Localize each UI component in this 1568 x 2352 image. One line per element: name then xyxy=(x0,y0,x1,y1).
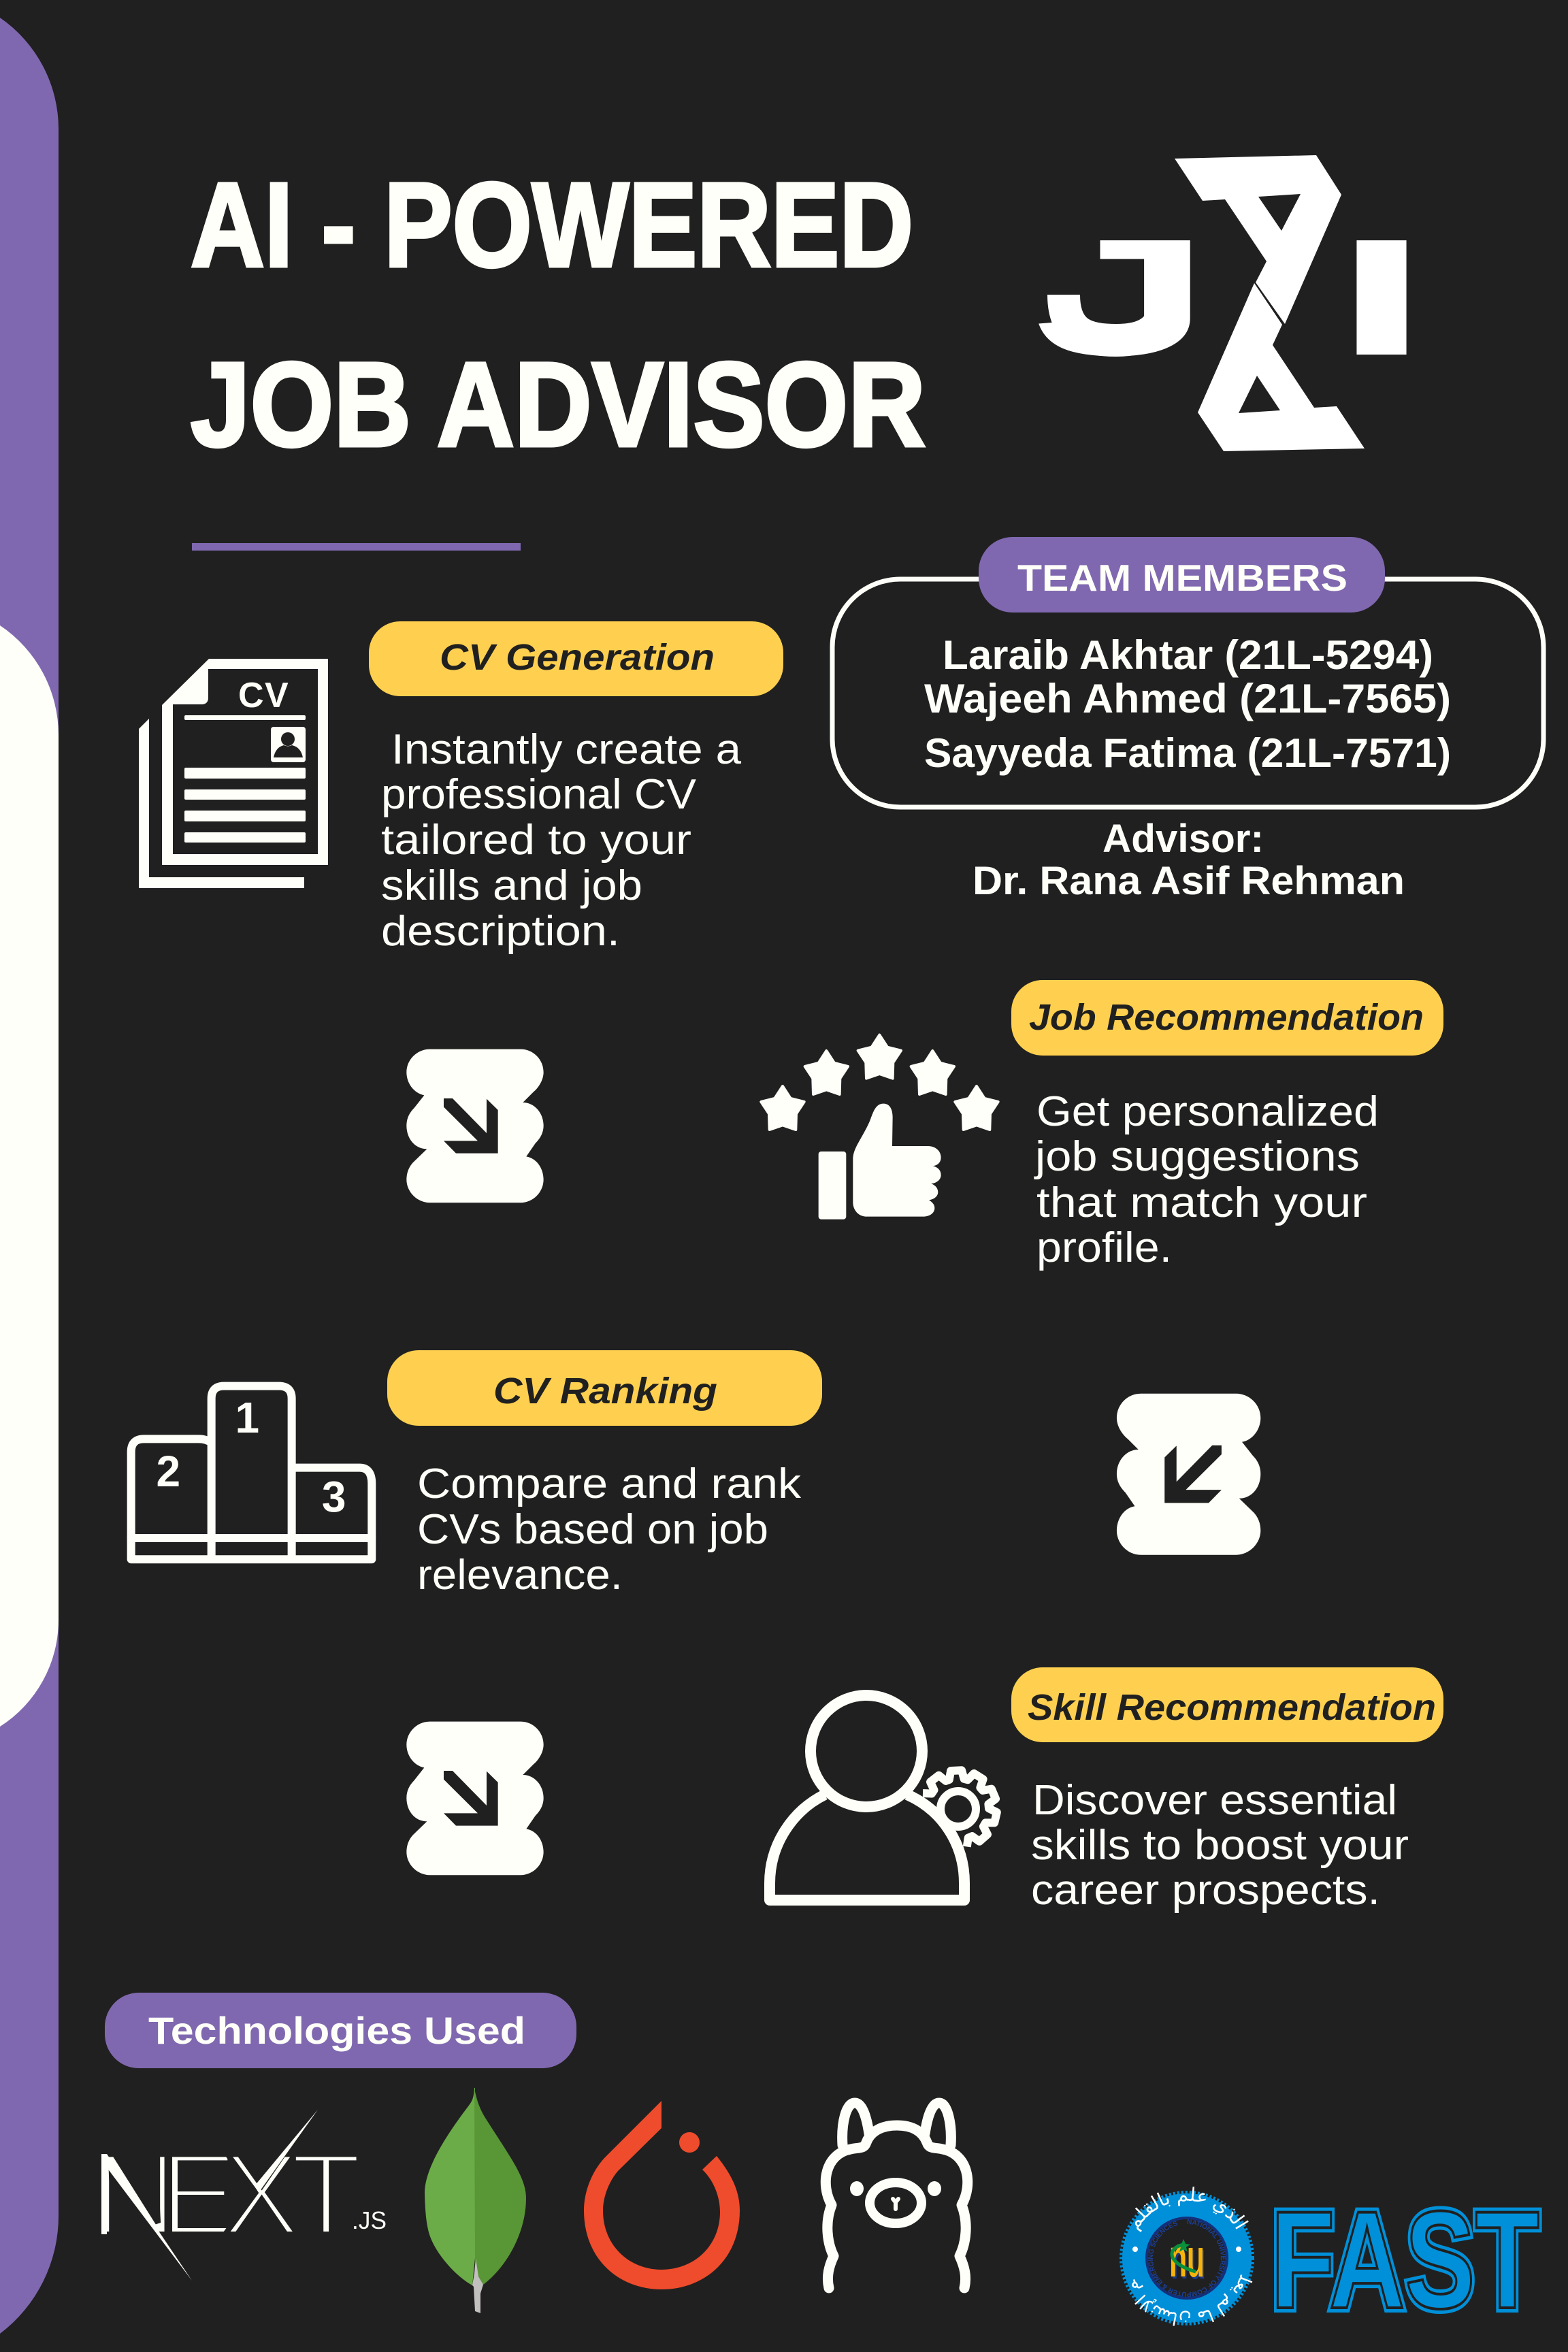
icon: CV document xyxy=(139,659,328,888)
left purple strip xyxy=(0,18,59,2334)
skill recommendation description: skills to boost your xyxy=(1031,1822,1409,1869)
logo: NU university seal: nu xyxy=(1169,2227,1205,2288)
logo: Ollama llama xyxy=(826,2103,968,2288)
job recommendation description: profile. xyxy=(1036,1224,1172,1271)
logo: NU university seal: الذي علم بالقلم xyxy=(1135,2187,1249,2232)
icon: podium: 3 xyxy=(322,1473,346,1522)
advisor: Advisor: xyxy=(1102,817,1264,861)
CV ranking description: relevance. xyxy=(417,1552,623,1599)
logo: NU university seal xyxy=(1120,2187,1254,2326)
CV generation pill xyxy=(369,621,783,696)
title: JOB ADVISOR xyxy=(191,338,926,472)
advisor xyxy=(973,817,1405,903)
logo: JAI mark: I xyxy=(1334,205,1430,390)
job recommendation description: job suggestions xyxy=(1034,1133,1360,1180)
title xyxy=(191,159,926,472)
icon: person with gear xyxy=(770,1695,997,1900)
logo: Next.js: .JS xyxy=(352,2206,387,2234)
panel: job recommendation xyxy=(761,980,1443,1271)
skill recommendation label: Skill Recommendation xyxy=(1028,1687,1436,1728)
title underline xyxy=(192,543,521,551)
logo: JAI mark: J xyxy=(1034,204,1212,390)
CV ranking description: CVs based on job xyxy=(417,1506,768,1553)
panel: team members xyxy=(832,537,1544,807)
CV generation description: skills and job xyxy=(381,862,642,909)
icon: podium xyxy=(131,1386,372,1559)
CV generation description xyxy=(381,726,742,955)
panel: CV ranking xyxy=(131,1350,822,1599)
team member names: Laraib Akhtar (21L-5294) xyxy=(943,632,1433,678)
team member names: Wajeeh Ahmed (21L-7565) xyxy=(924,676,1451,721)
skill recommendation description xyxy=(1031,1777,1409,1914)
CV ranking pill xyxy=(387,1350,822,1426)
CV ranking label: CV Ranking xyxy=(493,1371,717,1411)
logo: JAI mark xyxy=(1034,155,1430,451)
technologies heading: Technologies Used xyxy=(148,2009,525,2052)
icon: podium: 1 xyxy=(235,1393,259,1442)
logo: MongoDB leaf xyxy=(425,2088,526,2313)
logo: NU university seal: NATIONAL UNIVERSITY OF COMPUTER & EMERGING SCIENCES xyxy=(1148,2219,1226,2297)
job recommendation label: Job Recommendation xyxy=(1029,997,1424,1038)
panel: skill recommendation xyxy=(770,1667,1443,1914)
job recommendation pill xyxy=(1011,980,1443,1056)
logo: NU university seal: nu xyxy=(1171,2230,1206,2290)
job recommendation description xyxy=(1034,1088,1379,1271)
advisor: Dr. Rana Asif Rehman xyxy=(973,859,1405,903)
skill recommendation pill xyxy=(1011,1667,1443,1742)
icon: CV document: CV xyxy=(238,676,289,715)
CV generation description: professional CV xyxy=(381,771,697,818)
job recommendation description: that match your xyxy=(1036,1179,1367,1226)
CV generation description: description. xyxy=(381,908,620,955)
CV ranking description: Compare and rank xyxy=(417,1460,802,1507)
logo: PyTorch xyxy=(584,2101,740,2289)
title: AI - POWERED xyxy=(191,159,913,292)
arrow: to CV ranking xyxy=(1117,1394,1260,1555)
CV generation label: CV Generation xyxy=(440,637,715,678)
arrow: to skill recommendation xyxy=(406,1722,544,1875)
icon: stars and thumbs up xyxy=(761,1035,998,1220)
team members heading: TEAM MEMBERS xyxy=(1017,557,1348,599)
team member names: Sayyeda Fatima (21L-7571) xyxy=(924,730,1451,776)
skill recommendation description: career prospects. xyxy=(1031,1867,1380,1914)
CV generation description: Instantly create a xyxy=(391,726,742,773)
left white panel xyxy=(0,625,59,1727)
team members pill xyxy=(979,537,1385,612)
team member names xyxy=(924,632,1451,776)
logo: Next.js: NEXT xyxy=(93,2129,361,2259)
CV generation description: tailored to your xyxy=(381,817,691,864)
logo: Next.js xyxy=(93,2110,387,2281)
panel: CV generation xyxy=(139,621,783,955)
skill recommendation description: Discover essential xyxy=(1032,1777,1397,1824)
technologies pill xyxy=(105,1993,576,2068)
panel: technologies used xyxy=(93,1993,968,2313)
logo: NU university seal: علم الإنسان ما لم يعلم xyxy=(1132,2274,1252,2326)
CV ranking description xyxy=(417,1460,802,1599)
icon: podium: 2 xyxy=(157,1447,180,1496)
job recommendation description: Get personalized xyxy=(1036,1088,1379,1135)
arrow: to job recommendation xyxy=(406,1049,544,1203)
